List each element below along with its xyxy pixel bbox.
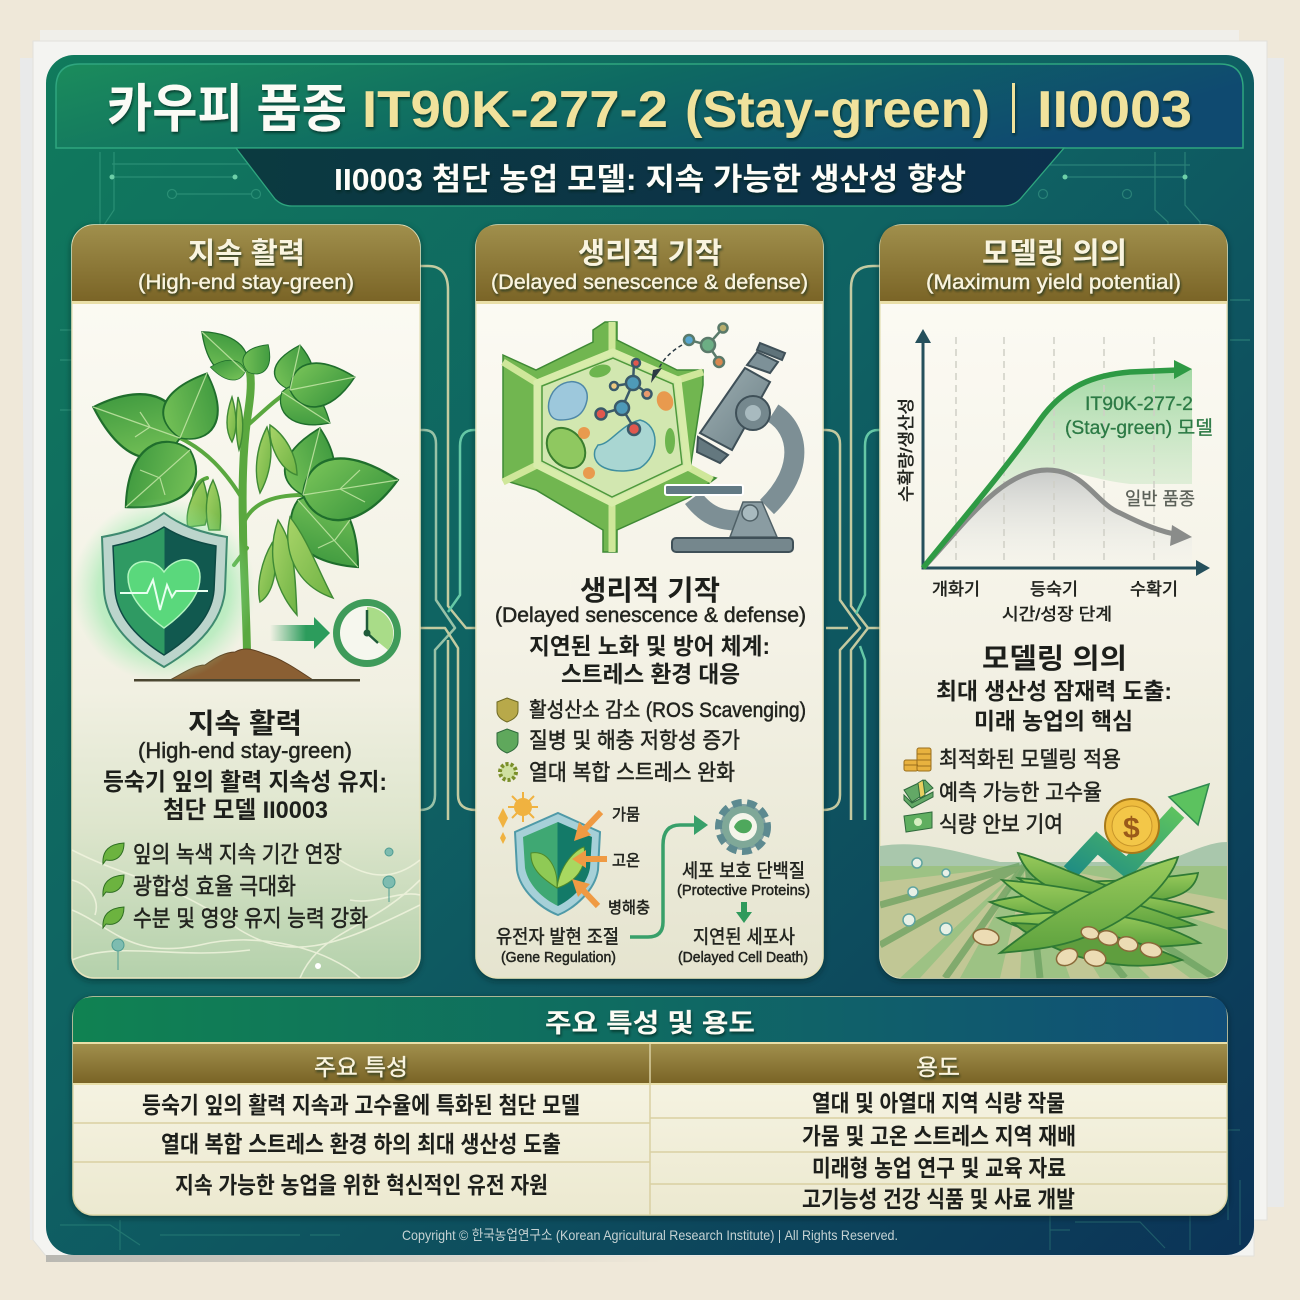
text: delayed cell death	[678, 926, 808, 966]
chart labels: IT90K-277-2	[1085, 394, 1193, 415]
heading: English: (High-end stay-green)	[138, 271, 354, 294]
title: model code: II0003	[1037, 81, 1192, 139]
text: description 2: 스트레스 환경 대응	[561, 661, 740, 687]
stress labels	[608, 806, 650, 917]
arrow: gene to proteins	[630, 815, 708, 937]
molecule inside	[596, 359, 652, 435]
heading: Korean: 지속 활력	[188, 237, 305, 270]
title: stay-green: (Stay-green)	[685, 81, 990, 139]
heading: English: (Maximum yield potential)	[926, 271, 1181, 294]
leaves	[83, 320, 403, 586]
icon: gear	[720, 804, 766, 850]
molecule outside	[684, 324, 728, 367]
stress labels: 병해충	[608, 899, 650, 917]
circuit decoration	[60, 152, 1250, 1250]
icon: clock	[333, 599, 401, 667]
icon: coin	[1105, 799, 1159, 853]
chart: yield curves: 개화기	[932, 580, 980, 599]
table title bar	[73, 997, 1227, 1042]
arrow: down	[736, 902, 752, 923]
connector lines between panels	[420, 266, 880, 820]
axes	[923, 340, 1198, 568]
subtitle tab: II0003 첨단 농업 모델: 지속 가능한 생산성 향상	[334, 162, 966, 197]
standard curve	[923, 470, 1180, 568]
icon: coin: $	[1123, 812, 1140, 845]
text: card English: (High-end stay-green)	[138, 738, 352, 763]
text: delayed cell death: (Delayed Cell Death)	[678, 949, 808, 966]
column: uses	[802, 1090, 1076, 1212]
bullet list: 잎의 녹색 지속 기간 연장	[133, 841, 342, 867]
chart: yield curves: 수확기	[1130, 580, 1178, 599]
title: Korean part: 카우피 품종	[107, 81, 347, 139]
column: key traits	[142, 1092, 580, 1198]
panel: 주요 특성 및 용도 table	[73, 997, 1227, 1215]
text: protective proteins	[677, 860, 810, 899]
column: uses: 가뭄 및 고온 스트레스 지역 재배	[802, 1123, 1076, 1149]
text: description 1: 지연된 노화 및 방어 체계:	[529, 633, 770, 659]
heading: Korean: 모델링 의의	[982, 237, 1127, 270]
illustration: bean plant	[83, 320, 403, 682]
text: card title: 생리적 기작	[580, 575, 720, 606]
chart: yield curves: 일반 품종	[1125, 489, 1195, 509]
text: description 2: 첨단 모델 II0003	[163, 797, 328, 824]
nucleus	[594, 420, 655, 471]
icon: sun marks	[498, 792, 538, 844]
map pins	[112, 848, 395, 970]
text: card title: 모델링 의의	[982, 643, 1127, 674]
illustration: beans	[972, 925, 1163, 969]
icon: rising arrow	[1070, 784, 1209, 872]
panel: 생리적 기작	[476, 225, 823, 978]
column: key traits: 열대 복합 스트레스 환경 하의 최대 생산성 도출	[161, 1131, 561, 1157]
heading: Korean: 생리적 기작	[578, 237, 722, 270]
text: description 1: 등숙기 잎의 활력 지속성 유지:	[103, 769, 387, 796]
panel header	[880, 225, 1227, 302]
illustration: field	[880, 842, 1227, 978]
bullet list: 광합성 효율 극대화	[133, 873, 296, 899]
icon: stress shield	[515, 813, 600, 915]
panel: 지속 활력	[72, 225, 420, 978]
text: protective proteins: 세포 보호 단백질	[682, 860, 805, 882]
title: separator	[1012, 83, 1015, 133]
bullet list	[103, 841, 368, 931]
topographic background	[72, 850, 420, 978]
text: gene regulation: (Gene Regulation)	[501, 949, 616, 966]
text: card title: 지속 활력	[188, 708, 302, 739]
text: card English: (Delayed senescence & defense)	[495, 604, 806, 627]
stay-green curve	[923, 370, 1178, 568]
bullet list: 예측 가능한 고수율	[939, 780, 1102, 805]
leaf veins	[93, 332, 398, 567]
text: delayed cell death: 지연된 세포사	[693, 926, 795, 948]
bullet list: 활성산소 감소 (ROS Scavenging)	[529, 699, 806, 722]
column: uses: 열대 및 아열대 지역 식량 작물	[812, 1090, 1065, 1116]
illustration: microscope	[665, 343, 794, 552]
bullet list: 질병 및 해충 저항성 증가	[529, 728, 740, 753]
subtitle tab	[236, 148, 1064, 206]
text: description 1: 최대 생산성 잠재력 도출:	[936, 678, 1172, 704]
column: key traits: 지속 가능한 농업을 위한 혁신적인 유전 자원	[175, 1172, 548, 1198]
panel header	[476, 225, 823, 302]
title: cultivar: IT90K-277-2	[362, 81, 668, 139]
icon: banknote	[904, 812, 932, 832]
icon: cash stack	[904, 780, 933, 808]
panel: 모델링 의의	[880, 225, 1227, 978]
icon: shield with heartbeat	[72, 498, 256, 682]
text: description 2: 미래 농업의 핵심	[974, 708, 1133, 734]
column: uses: 미래형 농업 연구 및 교육 자료	[812, 1155, 1066, 1181]
bullet list: 수분 및 영양 유지 능력 강화	[133, 905, 368, 931]
column: key traits: 등숙기 잎의 활력 지속과 고수율에 특화된 첨단 모델	[142, 1092, 580, 1118]
table rules	[73, 1044, 1227, 1215]
column: uses: 고기능성 건강 식품 및 사료 개발	[802, 1186, 1075, 1212]
pods	[187, 397, 333, 615]
chloroplast	[539, 420, 593, 476]
text: gene regulation: 유전자 발현 조절	[496, 926, 619, 948]
panel header	[72, 225, 420, 304]
illustration: plant cell	[503, 322, 728, 552]
heading: English: (Delayed senescence & defense)	[491, 271, 808, 294]
bullet list: 최적화된 모델링 적용	[939, 747, 1121, 772]
chart: yield curves: (Stay-green) 모델	[1065, 417, 1213, 439]
chart: yield curves: 시간/성장 단계	[1002, 605, 1112, 624]
header row	[73, 1042, 1227, 1085]
header row: 용도	[916, 1054, 960, 1080]
bullet list: 열대 복합 스트레스 완화	[529, 760, 735, 785]
arrow: to clock	[270, 617, 330, 649]
title banner	[56, 64, 1243, 148]
chart: yield curves: 등숙기	[1030, 580, 1078, 599]
table title: 주요 특성 및 용도	[545, 1008, 755, 1038]
icon: coins	[904, 748, 931, 771]
chart: yield curves: 수확량/생산성	[897, 398, 916, 502]
stress arrows	[572, 812, 607, 906]
copyright: Copyright © 한국농업연구소 (Korean Agricultural Research Institute) | All Rights Reserved.	[402, 1227, 898, 1243]
stress labels: 고온	[612, 852, 640, 870]
bullet list: 식량 안보 기여	[939, 812, 1063, 837]
text: gene regulation	[496, 926, 619, 966]
bullet list	[904, 747, 1121, 837]
bullet list	[497, 698, 806, 785]
soil mound	[170, 649, 313, 680]
header row: 주요 특성	[314, 1054, 408, 1080]
chart: yield curves	[897, 329, 1213, 624]
text: protective proteins: (Protective Proteins)	[677, 882, 810, 899]
illustration: bean pods	[990, 853, 1212, 966]
stress labels: 가뭄	[612, 806, 640, 824]
plant stem and branches	[180, 372, 303, 652]
vacuole	[549, 382, 587, 420]
